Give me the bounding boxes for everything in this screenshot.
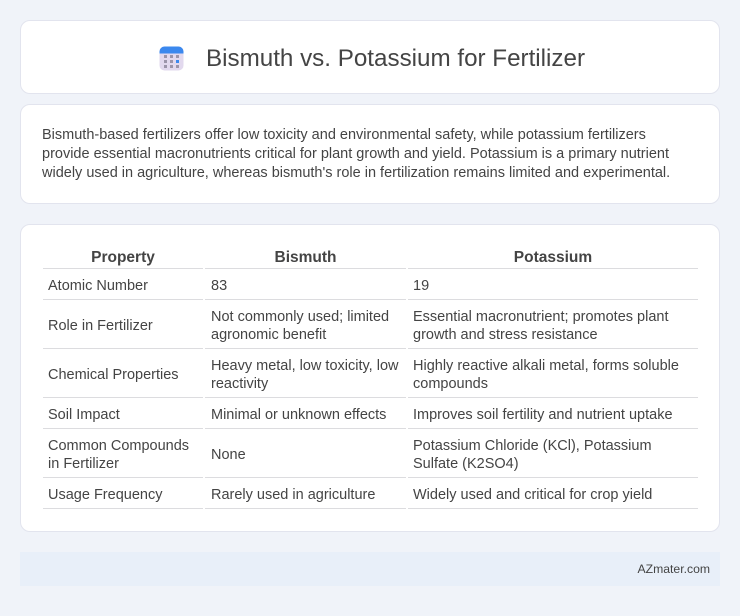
row: role in fertilizer: Essential macronutrient; promotes plant — [413, 309, 668, 325]
title: Bismuth vs. Potassium for Fertilizer — [206, 45, 585, 72]
row: common compounds — [43, 438, 698, 478]
row: common compounds: Common Compounds — [48, 438, 189, 454]
row: usage frequency — [43, 487, 698, 509]
icon: calendar — [160, 46, 184, 70]
row: atomic number: 83 — [211, 278, 227, 294]
row: usage frequency: Usage Frequency — [48, 487, 162, 503]
row: chemical properties: compounds — [413, 376, 488, 392]
header row — [43, 249, 698, 269]
row: common compounds: Sulfate (K2SO4) — [413, 456, 519, 472]
row: chemical properties: Heavy metal, low toxicity, low — [211, 358, 398, 374]
row: atomic number: Atomic Number — [48, 278, 148, 294]
footer bar — [20, 552, 720, 586]
row: soil impact: Soil Impact — [48, 407, 120, 423]
row: atomic number — [43, 278, 698, 300]
row: role in fertilizer: Not commonly used; limited — [211, 309, 389, 325]
summary text: Bismuth-based fertilizers offer low toxicity and environmental safety, while potassium fertilizers — [42, 127, 646, 143]
row: soil impact: Minimal or unknown effects — [211, 407, 386, 423]
row: usage frequency: Rarely used in agriculture — [211, 487, 375, 503]
header row: Potassium — [514, 249, 592, 266]
row: soil impact — [43, 407, 698, 429]
row: role in fertilizer — [43, 309, 698, 349]
row: role in fertilizer: agronomic benefit — [211, 327, 326, 343]
title card — [20, 20, 720, 94]
header row: Bismuth — [274, 249, 336, 266]
row: common compounds: None — [211, 447, 246, 463]
row: role in fertilizer: growth and stress resistance — [413, 327, 598, 343]
row: common compounds: Potassium Chloride (KCl), Potassium — [413, 438, 652, 454]
row: chemical properties — [43, 358, 698, 398]
row: atomic number: 19 — [413, 278, 429, 294]
row: soil impact: Improves soil fertility and nutrient uptake — [413, 407, 673, 423]
table card — [20, 224, 720, 532]
row: common compounds: in Fertilizer — [48, 456, 119, 472]
row: chemical properties: Highly reactive alkali metal, forms soluble — [413, 358, 679, 374]
comparison table — [43, 249, 698, 509]
summary text: provide essential macronutrients critical for plant growth and yield. Potassium is a primary nutrient — [42, 146, 669, 162]
summary text — [42, 127, 670, 181]
row: chemical properties: reactivity — [211, 376, 268, 392]
summary text: widely used in agriculture, whereas bismuth's role in fertilization remains limited and experimental. — [42, 165, 670, 181]
row: chemical properties: Chemical Properties — [48, 367, 179, 383]
summary card — [20, 104, 720, 204]
row: role in fertilizer: Role in Fertilizer — [48, 318, 153, 334]
header row: Property — [91, 249, 155, 266]
footer credit: AZmater.com — [638, 562, 710, 576]
row: usage frequency: Widely used and critical for crop yield — [413, 487, 652, 503]
